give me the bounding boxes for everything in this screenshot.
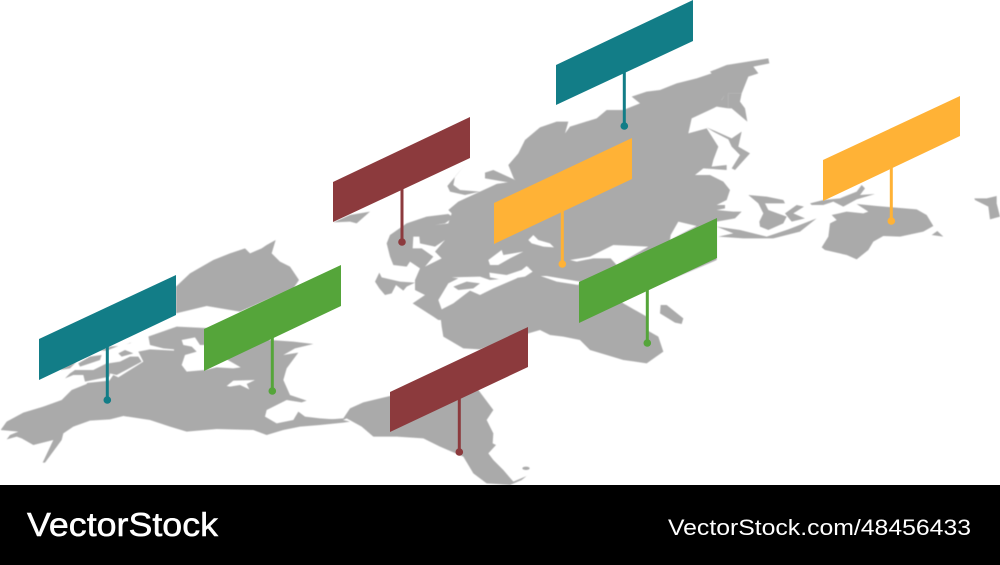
island: Falklands bbox=[522, 467, 530, 470]
continent: Europe bbox=[375, 165, 543, 320]
pin: maroon South America bbox=[456, 392, 463, 456]
banner: maroon upper bbox=[333, 117, 470, 222]
pin: green Africa bbox=[644, 282, 651, 347]
Southeast Asia and Australia bbox=[717, 185, 1000, 259]
pin: teal Asia bbox=[620, 60, 628, 130]
footer logo text: VectorStock bbox=[27, 506, 219, 543]
pin: green North America bbox=[268, 330, 276, 395]
pin: amber Asia bbox=[558, 205, 566, 268]
continent: Africa bbox=[430, 273, 683, 363]
footer bar bbox=[0, 485, 1000, 565]
island: Madagascar bbox=[660, 305, 683, 324]
banner: green left bbox=[204, 265, 341, 371]
banner: teal left bbox=[39, 275, 176, 380]
banner: amber centre bbox=[494, 138, 632, 244]
world map bbox=[1, 58, 1000, 485]
banner: maroon lower bbox=[390, 327, 528, 432]
inland seas of Eurasia bbox=[333, 212, 580, 285]
Arctic archipelago of North America bbox=[57, 334, 174, 383]
banner: teal top bbox=[556, 0, 693, 105]
pin: teal North America bbox=[104, 340, 111, 404]
continent: Asia bbox=[458, 58, 769, 307]
pin: maroon Europe bbox=[398, 180, 406, 246]
continent: North America bbox=[1, 240, 350, 463]
continent: South America bbox=[330, 390, 530, 485]
footer image id text: VectorStock.com/48456433 bbox=[668, 515, 971, 540]
banner: green centre bbox=[579, 218, 717, 323]
pin: amber Australia bbox=[888, 160, 895, 225]
banner: amber right bbox=[823, 96, 960, 201]
